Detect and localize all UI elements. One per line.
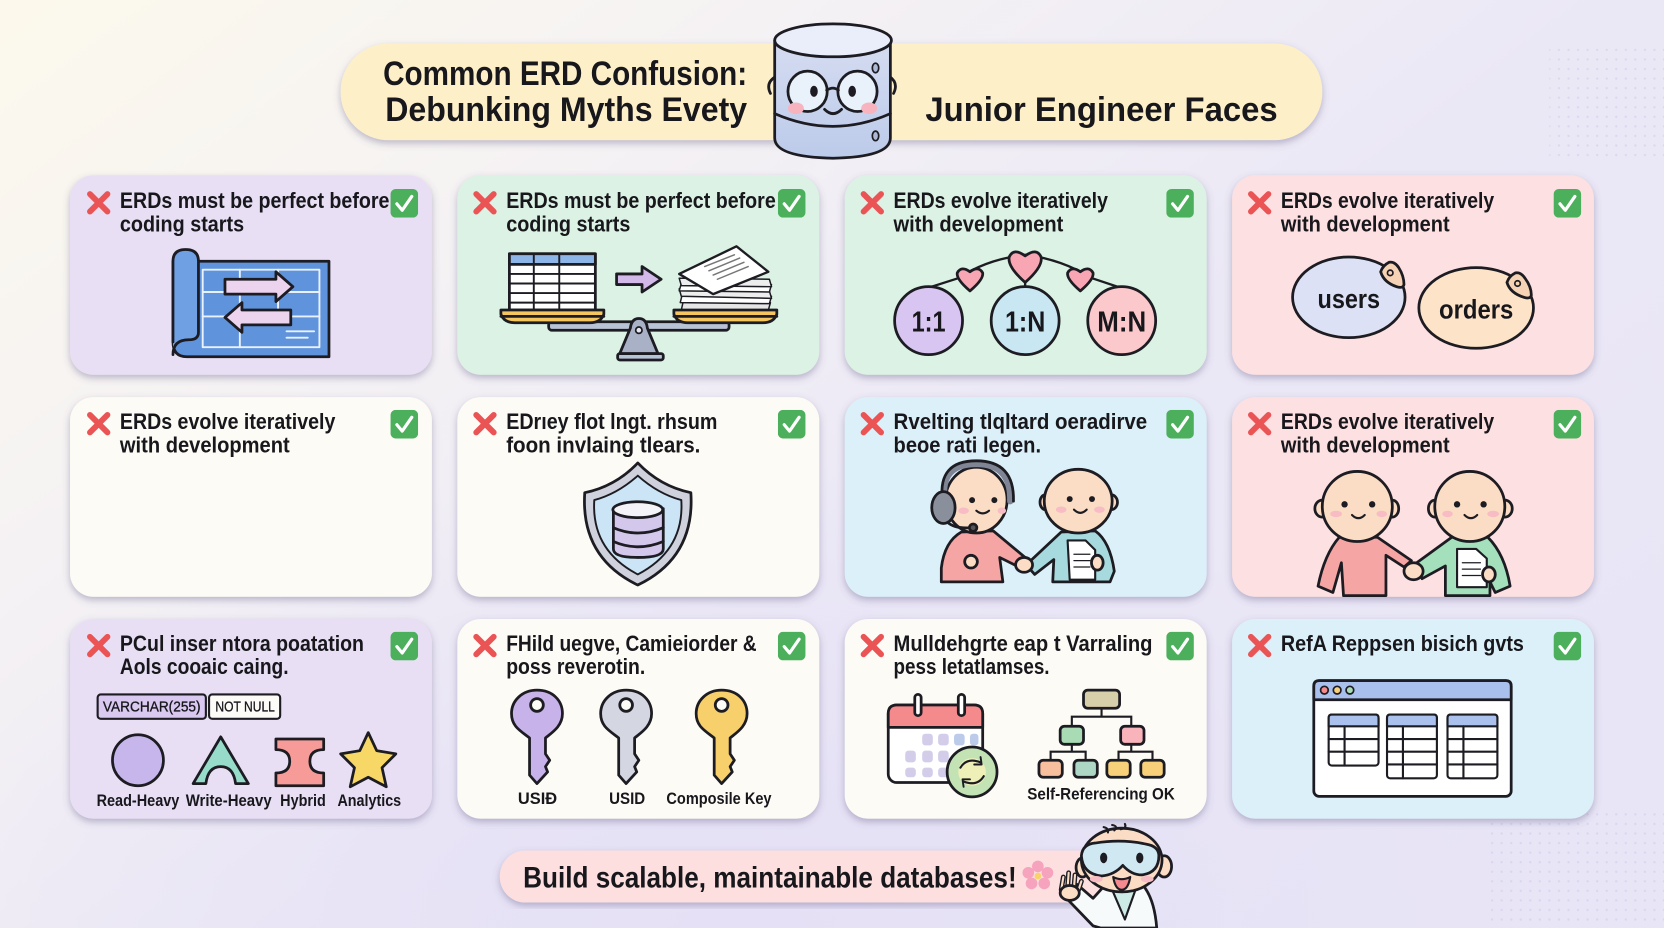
- icon: shield with database: [584, 463, 691, 585]
- tag: NOT NULL: NOT NULL: [215, 699, 275, 715]
- icon: correct: [391, 410, 418, 439]
- icon: blueprint: [173, 250, 329, 357]
- icon: scale base: [501, 310, 777, 360]
- icon: Analytics star: [337, 733, 401, 810]
- panel: row 2 card 1 blank: [70, 397, 432, 597]
- icon: purple key: [512, 690, 562, 808]
- entity: users: users: [1318, 284, 1380, 314]
- panel: row 1 card 1 blueprint: [70, 175, 432, 375]
- icon: purple key: USIÐ: [518, 790, 557, 808]
- myth text: pess letatlamses.: [894, 654, 1050, 679]
- icon: Hybrid puzzle: [276, 739, 326, 810]
- icon: silver key: USID: [609, 790, 645, 808]
- icon: arrow: [617, 267, 661, 292]
- icon: wrong: [1251, 637, 1268, 654]
- icon: correct: [391, 632, 418, 660]
- icon: 1:N badge: 1:N: [1005, 306, 1045, 338]
- panel: row 3 card 4 browser window: [1232, 619, 1594, 819]
- icon: M:N badge: M:N: [1097, 306, 1146, 338]
- myth text: Aols cooaic caing.: [120, 654, 289, 679]
- myth text: ERDs must be perfect before: [506, 188, 776, 213]
- entity: orders: orders: [1439, 295, 1513, 325]
- entity: users: [1293, 257, 1405, 338]
- icon: table on scale: [509, 254, 595, 310]
- title text: Common ERD Confusion:: [383, 55, 747, 93]
- myth text: ERDs must be perfect before: [120, 188, 389, 213]
- myth text: [893, 188, 1108, 236]
- icon: wrong: [1251, 194, 1268, 212]
- title pill: [341, 44, 1322, 140]
- myth text: [506, 188, 776, 236]
- icon: gold key: [666, 690, 772, 808]
- icon: correct: [1554, 189, 1581, 218]
- myth text: [506, 631, 757, 679]
- myth text: [119, 409, 336, 457]
- icon: database mascot with glasses: [769, 24, 895, 158]
- panel: row 2 card 2 shield: [457, 397, 819, 597]
- title text: Junior Engineer Faces: [925, 91, 1278, 129]
- myth text: with development: [893, 211, 1064, 236]
- myth text: ERDs evolve iteratively: [894, 188, 1108, 213]
- panel: row 2 card 4 handshake: [1232, 397, 1594, 597]
- icon: wrong: [90, 194, 107, 212]
- myth text: ERDs evolve iteratively: [1281, 188, 1495, 213]
- icon: browser with tables: [1314, 681, 1511, 796]
- title text: [383, 55, 1278, 129]
- icon: calendar with refresh: [888, 694, 997, 797]
- myth text: [894, 631, 1152, 679]
- panel: row 3 card 1 shapes: [70, 619, 432, 819]
- icon: engineer mascot with goggles: [1060, 824, 1172, 928]
- icon: 1:1 badge: [895, 287, 963, 355]
- myth text: RefA Reppsen bisich gvts: [1281, 631, 1524, 656]
- icon: wrong: [476, 637, 494, 654]
- myth text: with development: [1280, 211, 1450, 236]
- myth text: EDrıey flot lngt. rhsum: [506, 409, 717, 434]
- icon: relationship hearts: [908, 252, 1140, 294]
- myth text: with development: [119, 432, 290, 457]
- icon: correct: [1166, 189, 1194, 218]
- icon: wrong: [1251, 415, 1268, 432]
- icon: correct: [1554, 632, 1581, 660]
- entity: orders: [1419, 268, 1533, 348]
- myth text: ERDs evolve iteratively: [1281, 409, 1495, 434]
- myth text: poss reverotin.: [506, 654, 645, 679]
- icon: person with document: [1026, 469, 1117, 582]
- icon: handshake: [1016, 557, 1033, 572]
- icon: wrong: [864, 415, 881, 432]
- icon: wrong: [90, 415, 107, 432]
- icon: 1:1 badge: 1:1: [912, 306, 946, 338]
- panel: row 1 card 4 users and orders: [1232, 175, 1594, 375]
- icon: hierarchy tree: [1039, 690, 1164, 777]
- myth text: Mulldehgrte eap t Varraling: [894, 631, 1152, 656]
- myth text: [894, 409, 1147, 457]
- icon: correct: [1554, 410, 1581, 439]
- icon: wrong: [476, 194, 494, 212]
- icon: correct: [778, 410, 805, 439]
- myth text: [120, 188, 389, 236]
- panel: row 1 card 2 balance scale: [457, 175, 819, 375]
- myth text: foon invlaing tlears.: [506, 432, 700, 457]
- icon: Read-Heavy circle: Read-Heavy: [97, 792, 180, 810]
- icon: correct: [1166, 410, 1194, 439]
- icon: gold key: Composile Key: [666, 790, 772, 808]
- myth text: [1280, 188, 1495, 236]
- footer text: Build scalable, maintainable databases!: [523, 863, 1017, 895]
- panel: row 2 card 3 handshake with headset: [845, 397, 1207, 597]
- icon: correct: [391, 189, 418, 218]
- icon: handshake: [1404, 563, 1423, 580]
- icon: silver key: [601, 690, 652, 808]
- tag: VARCHAR(255): [98, 694, 206, 719]
- icon: person in pink: [1315, 471, 1411, 596]
- icon: person with headset: [932, 461, 1025, 582]
- icon: M:N badge: [1088, 287, 1156, 355]
- myth text: PCul inser ntora poatation: [120, 631, 364, 656]
- title text: Debunking Myths Evety: [385, 91, 747, 129]
- myth text: coding starts: [506, 211, 630, 236]
- myth text: [120, 631, 364, 679]
- icon: correct: [1166, 632, 1194, 660]
- icon: wrong: [864, 637, 881, 654]
- panel: row 3 card 3 calendar and tree: [845, 619, 1207, 819]
- panel: row 1 card 3 cardinality: [845, 175, 1207, 375]
- icon: wrong: [90, 637, 107, 654]
- icon: Read-Heavy circle: [97, 735, 180, 810]
- myth text: Rvelting tlqltard oeradirve: [894, 409, 1147, 434]
- myth text: coding starts: [120, 211, 244, 236]
- footer pill: [500, 850, 1105, 903]
- icon: flower: [1022, 861, 1053, 889]
- icon: wrong: [864, 194, 881, 212]
- icon: correct: [778, 632, 805, 660]
- myth text: ERDs evolve iteratively: [120, 409, 336, 434]
- tag: NOT NULL: [209, 694, 280, 719]
- panel: row 3 card 2 keys: [457, 619, 819, 819]
- myth text: [506, 409, 717, 457]
- icon: 1:N badge: [991, 287, 1059, 355]
- title banner: [341, 24, 1322, 158]
- myth text: FHild uegve, Camieiorder &: [506, 631, 757, 656]
- myth text: beoe rati legen.: [894, 432, 1041, 457]
- icon: wrong: [476, 415, 494, 432]
- icon: Analytics star: Analytics: [337, 792, 401, 810]
- tree label: Self-Referencing OK: [1027, 786, 1175, 804]
- icon: person in green with document: [1417, 471, 1512, 596]
- footer banner: [500, 824, 1172, 928]
- icon: Write-Heavy triangle: [186, 737, 272, 810]
- myth text: [1280, 409, 1495, 457]
- tag: VARCHAR(255): VARCHAR(255): [103, 699, 201, 715]
- icon: paper stack: [679, 246, 772, 310]
- icon: Hybrid puzzle: Hybrid: [280, 792, 326, 810]
- icon: Write-Heavy triangle: Write-Heavy: [186, 792, 272, 810]
- myth text: with development: [1280, 432, 1450, 457]
- icon: correct: [778, 189, 805, 218]
